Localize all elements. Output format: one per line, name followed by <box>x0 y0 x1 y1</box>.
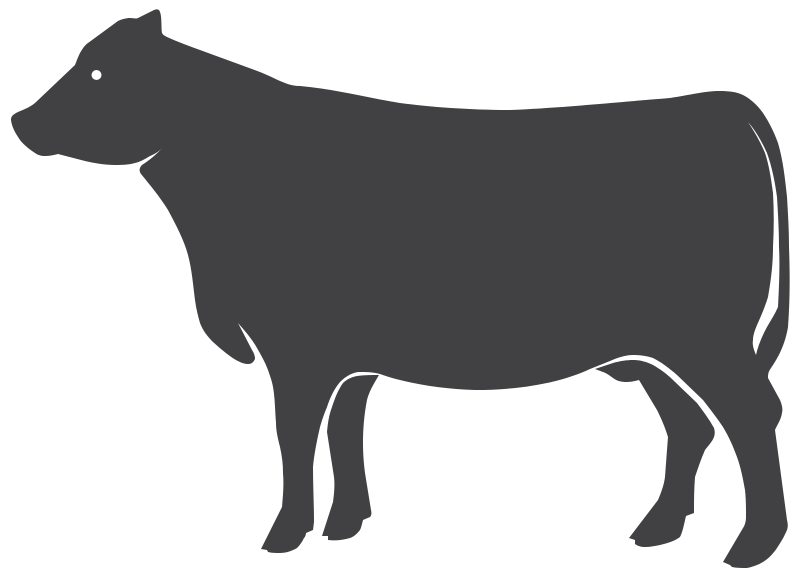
far rear leg <box>595 360 715 547</box>
eye <box>92 70 102 80</box>
tail gap highlight <box>748 122 779 355</box>
far front leg <box>322 375 379 540</box>
